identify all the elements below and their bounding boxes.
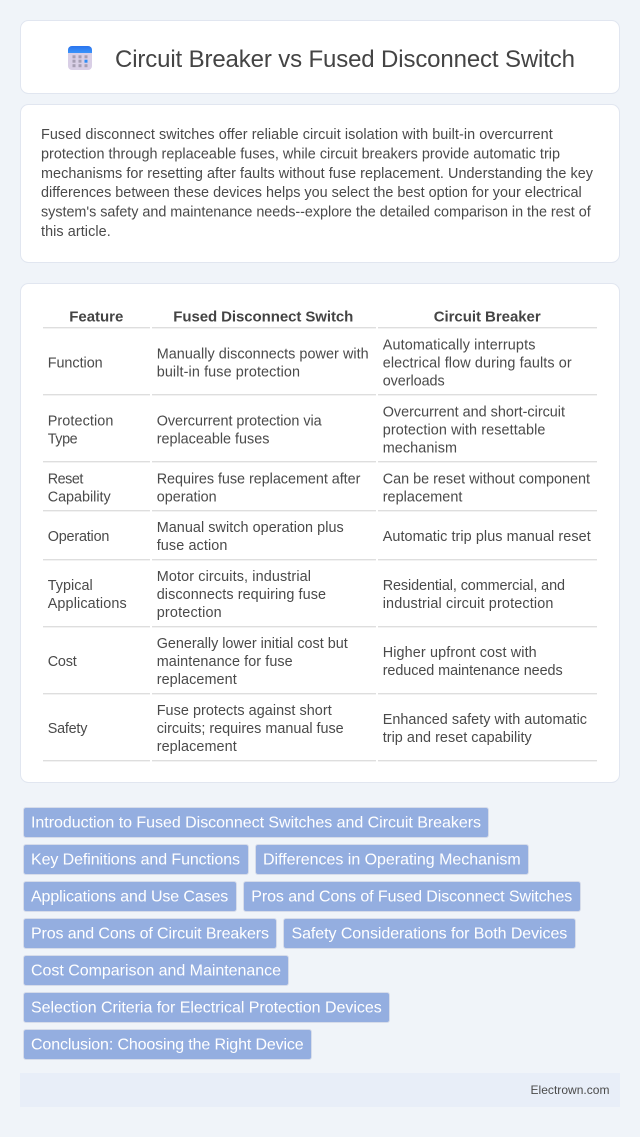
- row: operation: Automatic trip plus manual reset: [383, 529, 591, 545]
- intro paragraph: mechanisms for resetting after faults without fuse replacement. Understanding the key: [41, 166, 594, 182]
- topic: key definitions: [24, 844, 248, 874]
- topic: applications: Applications and Use Cases: [31, 889, 228, 906]
- row: safety: replacement: [157, 739, 237, 755]
- footer credit: Electrown.com: [530, 1083, 610, 1097]
- intro paragraph: differences between these devices helps you select the best option for your electrical: [41, 185, 582, 201]
- topic: conclusion: [24, 1030, 312, 1060]
- row: operation: [43, 520, 597, 560]
- row: reset capability: Can be reset without component: [383, 471, 590, 487]
- table header row: Circuit Breaker: [434, 308, 541, 325]
- row: protection type: mechanism: [383, 440, 457, 456]
- intro paragraph: this article.: [41, 224, 111, 240]
- topic: conclusion: Conclusion: Choosing the Right Device: [31, 1037, 304, 1054]
- intro paragraph: protection through replaceable fuses, while circuit breakers provide automatic trip: [41, 146, 560, 162]
- topic: cost: [24, 956, 288, 986]
- row: reset capability: Reset: [48, 471, 83, 487]
- topic: operating mechanism: [256, 844, 528, 874]
- row: typical applications: protection: [157, 605, 222, 621]
- row: safety: Fuse protects against short: [157, 703, 332, 719]
- row: cost: [43, 636, 597, 694]
- row: cost: Cost: [48, 654, 77, 670]
- table header row: Feature: [69, 308, 123, 325]
- table header row: [43, 308, 597, 328]
- footer: [20, 1073, 620, 1107]
- row: typical applications: Residential, commercial, and: [383, 578, 565, 594]
- row: protection type: Overcurrent protection via: [157, 413, 322, 429]
- row: function: overloads: [383, 373, 445, 389]
- row: reset capability: Requires fuse replacement after: [157, 471, 361, 487]
- row: protection type: replaceable fuses: [157, 431, 269, 447]
- icon: calendar grid: [68, 46, 92, 70]
- topic: operating mechanism: Differences in Operating Mechanism: [263, 852, 521, 869]
- row: protection type: Type: [48, 431, 78, 447]
- topic links: [24, 808, 580, 1060]
- topic: cost: Cost Comparison and Maintenance: [31, 963, 281, 980]
- row: cost: reduced maintenance needs: [383, 663, 563, 679]
- topic: breaker pros and cons: [24, 918, 276, 948]
- row: safety: Safety: [48, 721, 88, 737]
- title: Circuit Breaker vs Fused Disconnect Switch: [115, 46, 575, 73]
- panel: comparison table: [20, 284, 620, 782]
- row: function: Manually disconnects power with: [157, 346, 369, 362]
- row: function: built-in fuse protection: [157, 364, 300, 380]
- topic: introduction: Introduction to Fused Disconnect Switches and Circuit Breakers: [31, 815, 481, 832]
- intro paragraph: Fused disconnect switches offer reliable circuit isolation with built-in overcurrent: [41, 127, 553, 143]
- row: cost: Generally lower initial cost but: [157, 636, 348, 652]
- row: safety: trip and reset capability: [383, 730, 532, 746]
- topic: selection criteria: Selection Criteria for Electrical Protection Devices: [31, 1000, 382, 1017]
- row: function: Automatically interrupts: [383, 337, 535, 353]
- topic: introduction: [24, 808, 488, 838]
- row: typical applications: Applications: [48, 596, 127, 612]
- row: protection type: Overcurrent and short-circuit: [383, 404, 565, 420]
- table header row: Fused Disconnect Switch: [173, 308, 353, 325]
- topic: fused switch pros and cons: [244, 882, 580, 912]
- intro paragraph: system's safety and maintenance needs--explore the detailed comparison in the rest of: [41, 205, 592, 221]
- row: cost: Higher upfront cost with: [383, 645, 537, 661]
- row: protection type: protection with resettable: [383, 422, 545, 438]
- topic: safety: Safety Considerations for Both Devices: [292, 926, 567, 943]
- row: function: electrical flow during faults or: [383, 355, 572, 371]
- topic: fused switch pros and cons: Pros and Cons of Fused Disconnect Switches: [251, 889, 572, 906]
- row: typical applications: Motor circuits, industrial: [157, 569, 311, 585]
- row: safety: [43, 703, 597, 761]
- row: reset capability: Capability: [48, 489, 111, 505]
- row: typical applications: industrial circuit protection: [383, 596, 553, 612]
- row: typical applications: [43, 569, 597, 627]
- row: function: [43, 337, 597, 395]
- row: cost: replacement: [157, 672, 237, 688]
- row: safety: circuits; requires manual fuse: [157, 721, 344, 737]
- intro paragraph: [41, 127, 594, 240]
- panel: introduction: [20, 104, 620, 262]
- row: typical applications: Typical: [48, 578, 93, 594]
- topic: applications: [24, 882, 236, 912]
- row: protection type: Protection: [48, 413, 113, 429]
- row: operation: fuse action: [157, 538, 227, 554]
- row: reset capability: operation: [157, 489, 217, 505]
- row: safety: Enhanced safety with automatic: [383, 712, 587, 728]
- row: protection type: [43, 404, 597, 462]
- row: reset capability: replacement: [383, 489, 462, 505]
- panel: header: [20, 20, 620, 94]
- topic: breaker pros and cons: Pros and Cons of Circuit Breakers: [31, 926, 269, 943]
- row: typical applications: disconnects requiring fuse: [157, 587, 326, 603]
- row: cost: maintenance for fuse: [157, 654, 293, 670]
- row: operation: Manual switch operation plus: [157, 520, 344, 536]
- row: function: Function: [48, 355, 103, 371]
- topic: safety: [284, 918, 576, 948]
- topic: selection criteria: [24, 992, 390, 1022]
- row: operation: Operation: [48, 529, 109, 545]
- row: reset capability: [43, 471, 597, 511]
- topic: key definitions: Key Definitions and Functions: [31, 852, 240, 869]
